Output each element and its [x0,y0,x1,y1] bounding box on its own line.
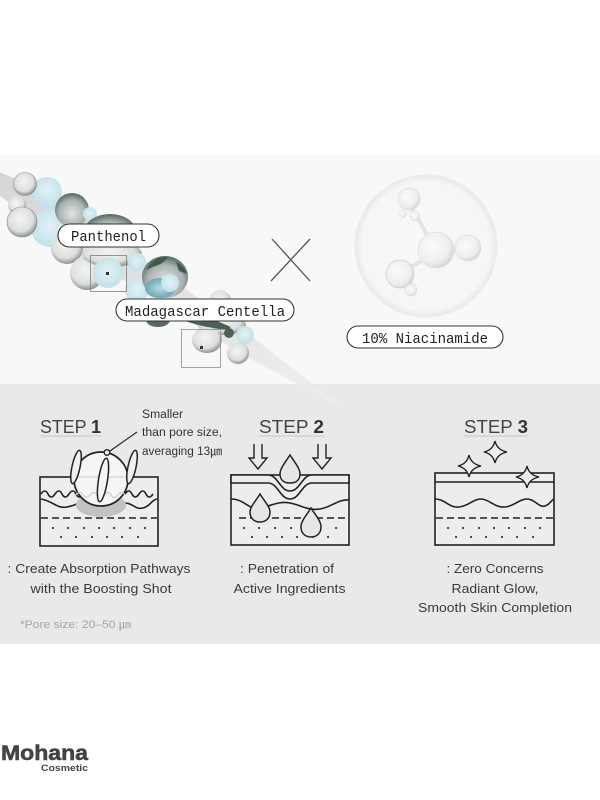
icon: central drop [280,455,300,483]
step 2 caption: : Penetration of [240,561,334,576]
label: Madagascar Centella: Madagascar Centella [125,304,285,321]
step 1 pore-size note [142,409,223,458]
step 1 caption: : Create Absorption Pathways [8,561,191,576]
step 3 caption [418,561,572,615]
step 2 caption: Active Ingredients [234,581,346,596]
label: 10% Niacinamide [347,326,503,348]
step 1 pore-size note: than pore size, [142,427,222,439]
step 1 pore-size note: averaging 13㎛ [142,446,223,458]
label: Panthenol [58,224,159,247]
step 3 caption: Smooth Skin Completion [418,600,572,615]
step 1 caption: with the Boosting Shot [29,581,172,596]
step 1 caption [8,561,191,596]
logo: Mohana Cosmetic: Mohana [1,742,88,765]
step 3 caption: Radiant Glow, [452,581,538,596]
step 3 heading: STEP 3 [464,417,528,437]
step 1 pore-size note: Smaller [142,409,183,421]
multiply icon [271,239,310,281]
step 1 heading: STEP 1 [40,417,101,437]
panel: steps [0,384,600,644]
target box: Centella [182,330,220,368]
target box: Panthenol [90,256,126,292]
label: Panthenol: Panthenol [71,229,146,246]
step 3 caption: : Zero Concerns [446,561,544,576]
step 2 heading: STEP 2 [259,417,324,437]
icon: right arrow [313,444,331,469]
step 2 caption [234,561,346,596]
logo: Mohana Cosmetic [1,742,88,773]
icon: left arrow [249,444,267,469]
step 2 skin diagram [231,475,349,545]
step 1 skin diagram [40,432,158,546]
step 3 skin diagram [435,473,554,545]
logo: Mohana Cosmetic: Cosmetic [41,763,88,773]
label: 10% Niacinamide: 10% Niacinamide [362,331,488,348]
icon: sparkles [458,441,539,488]
niacinamide molecule [355,175,497,317]
panel: ingredients [0,155,600,384]
needle with ingredient bubbles [0,172,345,409]
footnote: *Pore size: 20–50 ㎛ [20,619,131,631]
